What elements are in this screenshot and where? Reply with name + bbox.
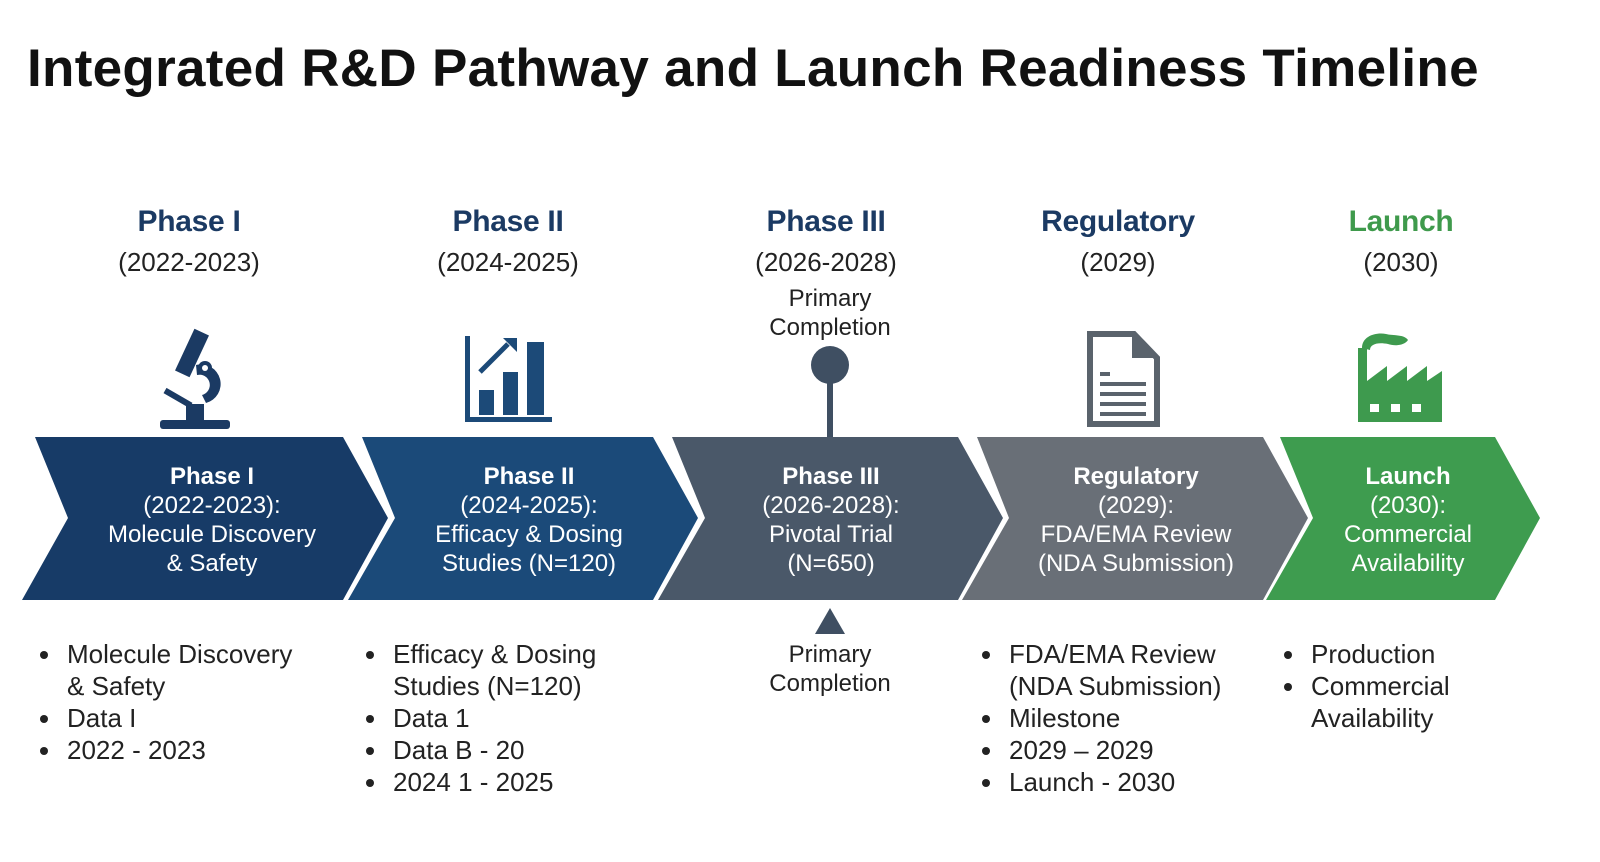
list: Phase II: Studies (N=120) (393, 671, 582, 701)
chevron text 2: (2024-2025): (460, 492, 598, 519)
title: Integrated R&D Pathway and Launch Readiness Timeline (27, 39, 1479, 98)
list: Launch: Availability (1311, 703, 1433, 733)
list: Launch: Production (1311, 639, 1435, 669)
header: Phase III (755, 205, 897, 277)
header: Regulatory (1041, 205, 1195, 277)
header: Regulatory: Regulatory (1041, 205, 1195, 238)
header: Phase I (118, 205, 260, 277)
icon: document (1090, 334, 1157, 424)
list: Launch: Commercial (1311, 671, 1450, 701)
list: Phase I (40, 639, 292, 765)
header: Phase I: (2022-2023) (118, 247, 260, 277)
icon: milestone pin (811, 346, 849, 438)
list: Phase I: Data I (67, 703, 136, 733)
milestone label top (769, 285, 891, 341)
chevron text 2: Efficacy & Dosing (435, 521, 623, 548)
icon: factory (1358, 334, 1442, 422)
chevron text 5: Commercial (1344, 521, 1472, 548)
milestone label top: Primary (789, 285, 871, 312)
list: Phase II (366, 639, 596, 797)
header: Phase II: (2024-2025) (437, 247, 579, 277)
chevron text 2 (435, 463, 623, 577)
list: Launch (1284, 639, 1450, 733)
chevron text 3: (2026-2028): (762, 492, 900, 519)
header: Launch: Launch (1349, 205, 1453, 238)
icon: microscope (160, 329, 230, 429)
chevron text 1: & Safety (167, 550, 257, 577)
triangle marker (815, 608, 845, 634)
header: Launch (1349, 205, 1453, 277)
chevron text 4 (1038, 463, 1234, 577)
chevron text 1: Phase I (170, 463, 254, 490)
list: Regulatory: 2029 – 2029 (1009, 735, 1154, 765)
list: Regulatory: (NDA Submission) (1009, 671, 1221, 701)
list: Phase I: Molecule Discovery (67, 639, 292, 669)
chevron text 5 (1344, 463, 1472, 577)
milestone label bottom (769, 641, 891, 697)
list: Regulatory: Launch - 2030 (1009, 767, 1175, 797)
chevron text 3: Pivotal Trial (769, 521, 893, 548)
header: Phase II: Phase II (452, 205, 564, 238)
chevron text 2: Phase II (484, 463, 574, 490)
chevron text 1: Molecule Discovery (108, 521, 316, 548)
list: Phase II: Data B - 20 (393, 735, 525, 765)
icon: bar chart (465, 336, 552, 422)
milestone label bottom: Primary (789, 641, 871, 668)
list: Regulatory: FDA/EMA Review (1009, 639, 1216, 669)
milestone label bottom: Completion (769, 670, 891, 697)
chevron text 5: (2030): (1370, 492, 1446, 519)
list: Regulatory (982, 639, 1221, 797)
list: Phase II: Efficacy & Dosing (393, 639, 596, 669)
chevron text 3: (N=650) (787, 550, 875, 577)
list: Phase II: Data 1 (393, 703, 470, 733)
header: Phase I: Phase I (138, 205, 240, 238)
chevron text 5: Availability (1352, 550, 1464, 577)
header: Phase III: (2026-2028) (755, 247, 897, 277)
header: Launch: (2030) (1363, 247, 1439, 277)
header: Regulatory: (2029) (1080, 247, 1156, 277)
chevron text 2: Studies (N=120) (442, 550, 616, 577)
chevron text 3 (762, 463, 900, 577)
header: Phase II (437, 205, 579, 277)
chevron text 3: Phase III (782, 463, 880, 490)
list: Phase I: & Safety (67, 671, 165, 701)
header: Phase III: Phase III (766, 205, 886, 238)
chevron text 5: Launch (1365, 463, 1451, 490)
chevrons (22, 437, 388, 600)
milestone label top: Completion (769, 314, 891, 341)
list: Regulatory: Milestone (1009, 703, 1120, 733)
chevron text 4: (NDA Submission) (1038, 550, 1234, 577)
chevron text 4: FDA/EMA Review (1041, 521, 1231, 548)
chevron text 1 (108, 463, 316, 577)
chevron text 4: Regulatory (1073, 463, 1199, 490)
list: Phase I: 2022 - 2023 (67, 735, 206, 765)
chevron text 1: (2022-2023): (143, 492, 281, 519)
chevron text 4: (2029): (1098, 492, 1174, 519)
list: Phase II: 2024 1 - 2025 (393, 767, 553, 797)
